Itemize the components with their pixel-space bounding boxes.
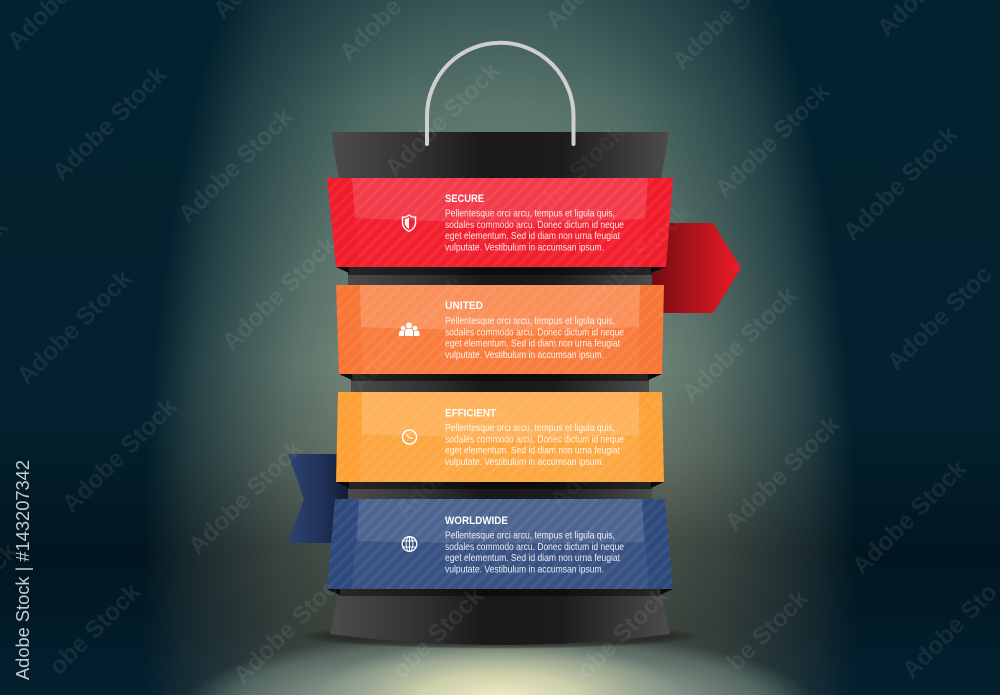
watermarks: obe Stock: [44, 578, 146, 680]
icon: shield: [402, 215, 416, 232]
text block: vulputate. Vestibulum in accumsan ipsum.: [445, 457, 604, 468]
watermarks: Adobe Stock: [47, 61, 172, 186]
watermarks over panels: Adobe Stock: [505, 119, 630, 244]
watermarks: Adobe Stock: [183, 435, 308, 560]
icon: globe: [402, 537, 417, 551]
text block: [445, 316, 624, 361]
panel: secure: [327, 178, 673, 267]
panel stripes: [336, 285, 664, 374]
bag handle: [427, 43, 574, 144]
watermarks: obe Stock: [572, 582, 674, 684]
watermarks: Adobe Sto: [897, 579, 1000, 684]
text block: Pellentesque orci arcu, tempus et ligula quis,: [445, 423, 615, 434]
heading: SECURE: [445, 193, 484, 205]
text block: sodales commodo arcu. Donec dictum id neque: [445, 434, 624, 446]
panel stripes: [336, 392, 664, 482]
watermarks over panels: [345, 119, 695, 524]
watermarks: Adobe Stock: [710, 78, 835, 203]
text block: Pellentesque orci arcu, tempus et ligula quis,: [445, 316, 615, 327]
panel stripes: [327, 499, 673, 589]
bag body: [327, 132, 673, 645]
column section below orange panel: [339, 374, 662, 393]
panel gloss: [362, 392, 639, 437]
panel base: [327, 499, 673, 589]
watermarks: Adobe Stock: [380, 57, 505, 182]
watermarks over panels: Adobe Stock: [390, 399, 515, 524]
panel gloss: [357, 499, 644, 543]
watermarks over panels: Adobe Stock: [545, 389, 670, 514]
text block: eget elementum. Sed id diam non urna feugiat: [445, 553, 620, 564]
text block: sodales commodo arcu. Donec dictum id neque: [445, 542, 624, 553]
text block: sodales commodo arcu. Donec dictum id neque: [445, 220, 624, 231]
text block: sodales commodo arcu. Donec dictum id neque: [445, 328, 624, 338]
panel base: [336, 392, 664, 482]
watermarks: Adobe Stock: [173, 103, 298, 228]
text block: vulputate. Vestibulum in accumsan ipsum.: [445, 242, 604, 254]
watermarks: Adobe Stock: [12, 265, 137, 390]
watermarks: Adobe Stock: [217, 231, 342, 356]
watermarks: Adobe Stock: [677, 282, 802, 407]
panel stripes: [327, 178, 673, 267]
watermarks: Adobe Stock: [228, 564, 353, 689]
panel: worldwide: [327, 499, 673, 589]
watermarks: Adobe Stock: [720, 411, 845, 536]
text block: [445, 208, 624, 254]
red arrow tab: [645, 223, 741, 313]
text block: vulputate. Vestibulum in accumsan ipsum.: [445, 350, 604, 361]
watermarks over panels: Adobe Stock: [570, 199, 695, 324]
watermarks: be Stock: [722, 585, 814, 676]
heading: EFFICIENT: [445, 408, 496, 420]
panel: efficient: [336, 392, 664, 482]
bag bottom section: [327, 589, 673, 645]
heading: UNITED: [445, 300, 483, 312]
heading: WORLDWIDE: [445, 515, 508, 527]
watermarks: Adobe Stock: [847, 455, 972, 580]
panel gloss: [360, 285, 640, 330]
text block: Pellentesque orci arcu, tempus et ligula quis,: [445, 530, 615, 542]
column section below red panel: [336, 267, 666, 286]
panel centre: [360, 392, 640, 482]
watermarks: obe Stock: [387, 582, 489, 684]
bag top section: [331, 132, 669, 180]
icon: team: [399, 322, 420, 336]
panel centre: [360, 285, 640, 374]
side credit: Adobe Stock | #143207342: [13, 460, 33, 680]
panel: united: [336, 285, 664, 374]
watermarks: Adobe Stock: [57, 393, 182, 518]
panel base: [336, 285, 664, 374]
text block: eget elementum. Sed id diam non urna feugiat: [445, 446, 620, 456]
watermarks: Adobe Stock: [838, 121, 963, 246]
panel centre: [352, 178, 648, 267]
text block: eget elementum. Sed id diam non urna feugiat: [445, 338, 620, 350]
column section below yellow panel: [336, 482, 664, 500]
text block: Pellentesque orci arcu, tempus et ligula quis,: [445, 208, 615, 220]
watermarks: Adobe Stoc: [882, 261, 997, 376]
text block: [445, 423, 624, 468]
text block: eget elementum. Sed id diam non urna feugiat: [445, 231, 620, 242]
panel gloss: [352, 178, 648, 222]
icon: clock: [402, 430, 416, 444]
blue flag tab: [288, 454, 350, 543]
text block: vulputate. Vestibulum in accumsan ipsum.: [445, 564, 604, 576]
panel centre: [352, 499, 649, 589]
text block: [445, 530, 624, 576]
panel base: [327, 178, 673, 267]
watermarks over panels: Adobe Stock: [345, 271, 470, 396]
